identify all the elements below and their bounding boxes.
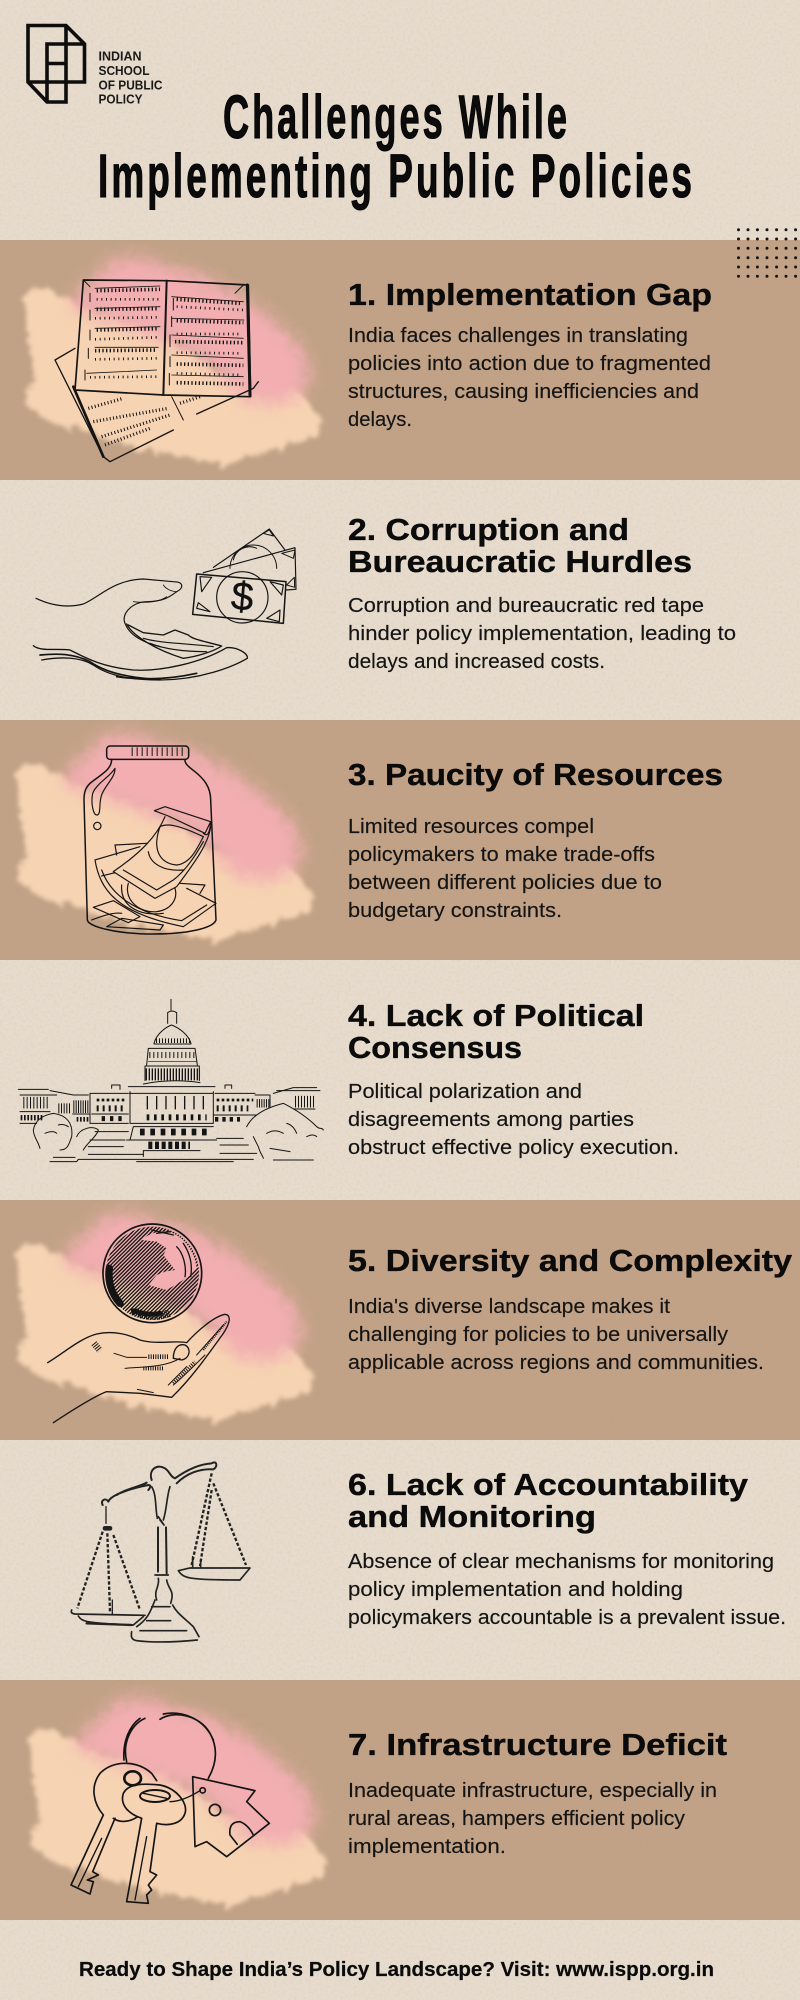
logo (28, 26, 163, 106)
text: diversity and complexity (348, 1244, 792, 1374)
body: policy implementation and holding (348, 1578, 683, 1601)
body: Corruption and bureaucratic red tape (348, 594, 704, 617)
body: hinder policy implementation, leading to (348, 622, 736, 645)
heading: 3. Paucity of Resources (348, 758, 723, 792)
body: Inadequate infrastructure, especially in (348, 1779, 717, 1802)
heading (348, 1468, 748, 1534)
body: structures, causing inefficiencies and (348, 380, 699, 403)
heading: and Monitoring (348, 1500, 596, 1534)
logo wordmark: INDIAN (98, 49, 142, 64)
body: implementation. (348, 1835, 506, 1858)
text: infrastructure deficit (348, 1728, 727, 1858)
logo wordmark: OF PUBLIC (98, 77, 163, 92)
icon: keys with house tag (71, 1713, 269, 1903)
panel: infrastructure deficit band (0, 1680, 800, 1920)
heading: 1. Implementation Gap (348, 278, 712, 312)
body: delays. (348, 408, 412, 431)
heading: 6. Lack of Accountability (348, 1468, 748, 1502)
title: Challenges While (223, 83, 570, 151)
text: accountability (348, 1468, 786, 1629)
body: delays and increased costs. (348, 650, 605, 673)
body: policies into action due to fragmented (348, 352, 711, 375)
text: political consensus (348, 999, 679, 1159)
dollar sign: $ (229, 574, 255, 620)
body: challenging for policies to be universally (348, 1323, 729, 1346)
panel: diversity and complexity band (0, 1200, 800, 1440)
icon: globe above hand (48, 1224, 229, 1423)
body: India's diverse landscape makes it (348, 1295, 670, 1318)
body (348, 1550, 786, 1629)
text: corruption (348, 513, 736, 673)
body: policymakers to make trade-offs (348, 843, 655, 866)
body: Absence of clear mechanisms for monitoring (348, 1550, 774, 1573)
icon: hand receiving money (33, 529, 296, 680)
brush blob 5 (15, 1212, 313, 1421)
logo wordmark: SCHOOL (98, 63, 150, 78)
body: between different policies due to (348, 871, 662, 894)
body (348, 324, 711, 431)
heading (348, 999, 644, 1065)
icon: sheet music books (55, 280, 258, 462)
heading: 2. Corruption and (348, 513, 629, 547)
body: rural areas, hampers efficient policy (348, 1807, 686, 1830)
footer call to action: Ready to Shape India’s Policy Landscape? Visit: www.ispp.org.in (79, 1959, 714, 1981)
body: India faces challenges in translating (348, 324, 688, 347)
text: paucity of resources (348, 758, 723, 922)
body: policymakers accountable is a prevalent issue. (348, 1606, 786, 1629)
logo wordmark: POLICY (98, 91, 143, 106)
heading: Bureaucratic Hurdles (348, 545, 692, 579)
heading: 4. Lack of Political (348, 999, 644, 1033)
body: Limited resources compel (348, 815, 594, 838)
text: implementation gap (348, 278, 712, 431)
body (348, 594, 736, 673)
body (348, 815, 662, 922)
brush blob 7 (28, 1697, 326, 1906)
icon: balance scales (71, 1462, 250, 1642)
body: budgetary constraints. (348, 899, 562, 922)
body (348, 1295, 764, 1374)
heading: 7. Infrastructure Deficit (348, 1728, 727, 1762)
panel: implementation gap band (0, 240, 800, 480)
dot grid decoration (737, 228, 797, 278)
body (348, 1779, 717, 1858)
heading: Consensus (348, 1031, 522, 1065)
body: obstruct effective policy execution. (348, 1136, 679, 1159)
body: disagreements among parties (348, 1108, 634, 1131)
logo mark (28, 26, 84, 102)
body: applicable across regions and communities. (348, 1351, 764, 1374)
panel: paucity of resources band (0, 720, 800, 960)
body: Political polarization and (348, 1080, 582, 1103)
heading (348, 513, 692, 579)
icon: capitol building (18, 999, 323, 1162)
body (348, 1080, 679, 1159)
brush blob 3 (15, 732, 313, 941)
logo wordmark (98, 49, 163, 106)
icon: jar of money (84, 746, 216, 934)
title (98, 83, 695, 210)
heading: 5. Diversity and Complexity (348, 1244, 792, 1278)
brush blob 1 (23, 256, 321, 465)
